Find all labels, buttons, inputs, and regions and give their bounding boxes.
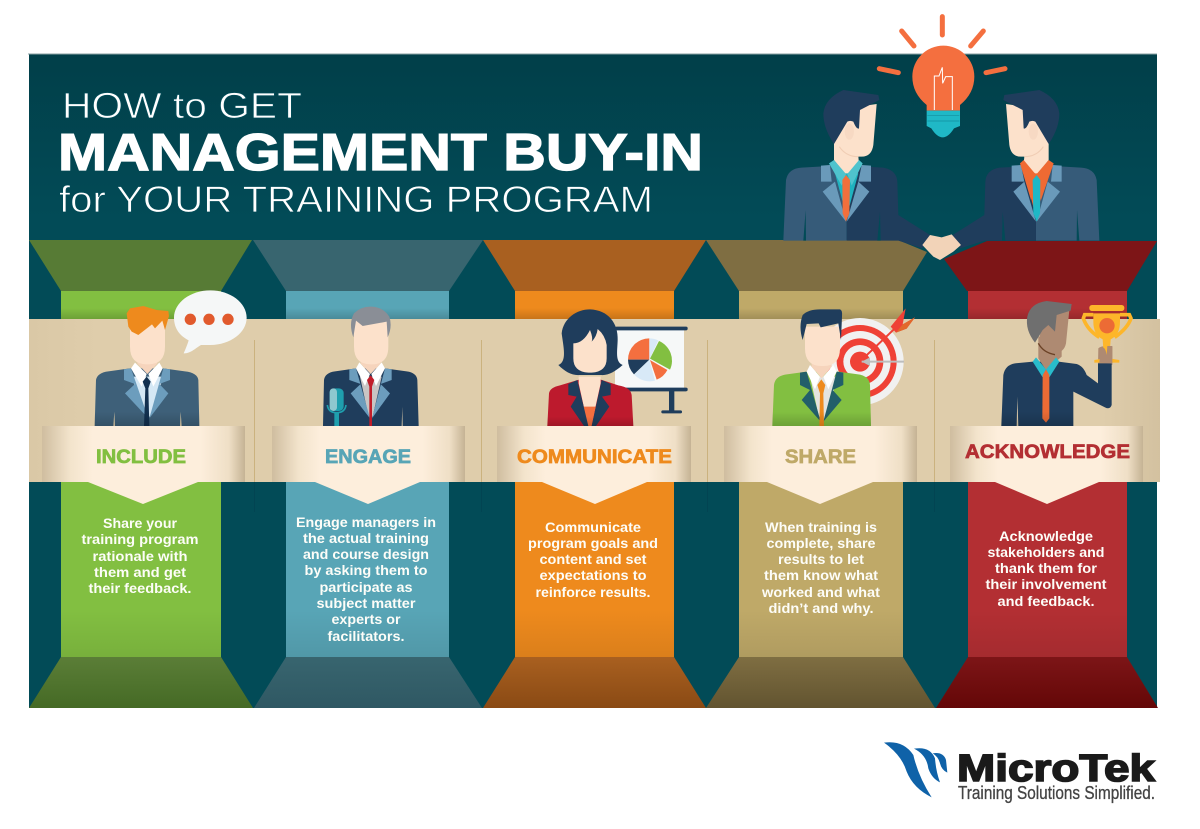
text block: acknowledge: stakeholders and	[988, 544, 1104, 560]
text block: acknowledge: their involvement	[986, 576, 1107, 592]
text block: engage: subject matter	[316, 595, 416, 611]
text block: engage	[296, 514, 436, 644]
title	[58, 85, 703, 220]
text block: engage: facilitators.	[328, 628, 404, 644]
figure: engage man with microphone	[323, 307, 419, 426]
column 5 red funnel	[936, 241, 1158, 708]
text block: communicate	[528, 519, 658, 600]
ribbon: engage: ENGAGE	[325, 446, 411, 468]
text block: engage: and course design	[303, 546, 429, 562]
ribbon: communicate	[497, 426, 691, 504]
beige band	[29, 319, 1160, 482]
title: for YOUR TRAINING PROGRAM	[59, 179, 653, 220]
text block: share: worked and what	[761, 584, 880, 600]
text block: acknowledge: and feedback.	[998, 593, 1094, 609]
text block: share: When training is	[765, 519, 877, 535]
logo: MicroTek: Training Solutions Simplified.	[958, 783, 1155, 803]
ribbon: acknowledge: ACKNOWLEDGE	[965, 441, 1130, 463]
title: HOW to GET	[62, 85, 302, 126]
title: MANAGEMENT BUY-IN	[58, 124, 703, 182]
text block: engage: Engage managers in	[296, 514, 436, 530]
ribbon: communicate: COMMUNICATE	[517, 446, 672, 468]
ribbon: share	[724, 426, 917, 504]
text block: include	[82, 515, 198, 596]
ribbon: share: SHARE	[785, 446, 856, 468]
text block: include: rationale with	[92, 548, 188, 564]
text block: include: their feedback.	[88, 580, 192, 596]
text block: communicate: content and set	[540, 551, 647, 567]
text block: engage: experts or	[332, 611, 401, 627]
logo: MicroTek: MicroTek	[957, 748, 1156, 790]
text block: communicate: reinforce results.	[536, 584, 650, 600]
text block: acknowledge	[986, 528, 1107, 609]
ribbon: acknowledge	[950, 426, 1143, 504]
text block: acknowledge: Acknowledge	[999, 528, 1093, 544]
text block: communicate: Communicate	[545, 519, 641, 535]
figure: share man with target	[772, 308, 915, 426]
column 1 green funnel	[29, 240, 253, 708]
ribbon: include	[42, 426, 245, 504]
text block: include: Share your	[103, 515, 178, 531]
ribbon: include: INCLUDE	[96, 446, 186, 468]
figure: communicate woman with chart	[547, 309, 688, 426]
figure: left businessman	[783, 90, 930, 248]
text block: include: training program	[82, 531, 198, 547]
logo: MicroTek	[884, 742, 1156, 803]
text block: communicate: expectations to	[540, 567, 646, 583]
text block: communicate: program goals and	[528, 535, 658, 551]
text block: share: complete, share	[766, 535, 876, 551]
icon: handshake	[922, 234, 961, 260]
text block: share: didn’t and why.	[768, 600, 874, 616]
text block: share: them know what	[764, 567, 878, 583]
icon: light bulb	[879, 17, 1005, 137]
text block: include: them and get	[94, 564, 186, 580]
figure: right businessman	[953, 90, 1099, 248]
figure: acknowledge man with trophy	[1001, 301, 1131, 426]
background panel	[28, 54, 1157, 708]
text block: engage: participate as	[320, 579, 413, 595]
text block: engage: the actual training	[303, 530, 429, 546]
ribbon: engage	[272, 426, 465, 504]
figure: include man with speech bubble	[95, 290, 247, 426]
column 3 orange funnel	[483, 240, 706, 708]
column 4 tan funnel	[706, 240, 935, 708]
column 2 blue funnel	[253, 240, 483, 708]
text block: share: results to let	[778, 551, 864, 567]
text block: engage: by asking them to	[304, 562, 428, 578]
text block: share	[761, 519, 880, 616]
text block: acknowledge: thank them for	[995, 560, 1098, 576]
